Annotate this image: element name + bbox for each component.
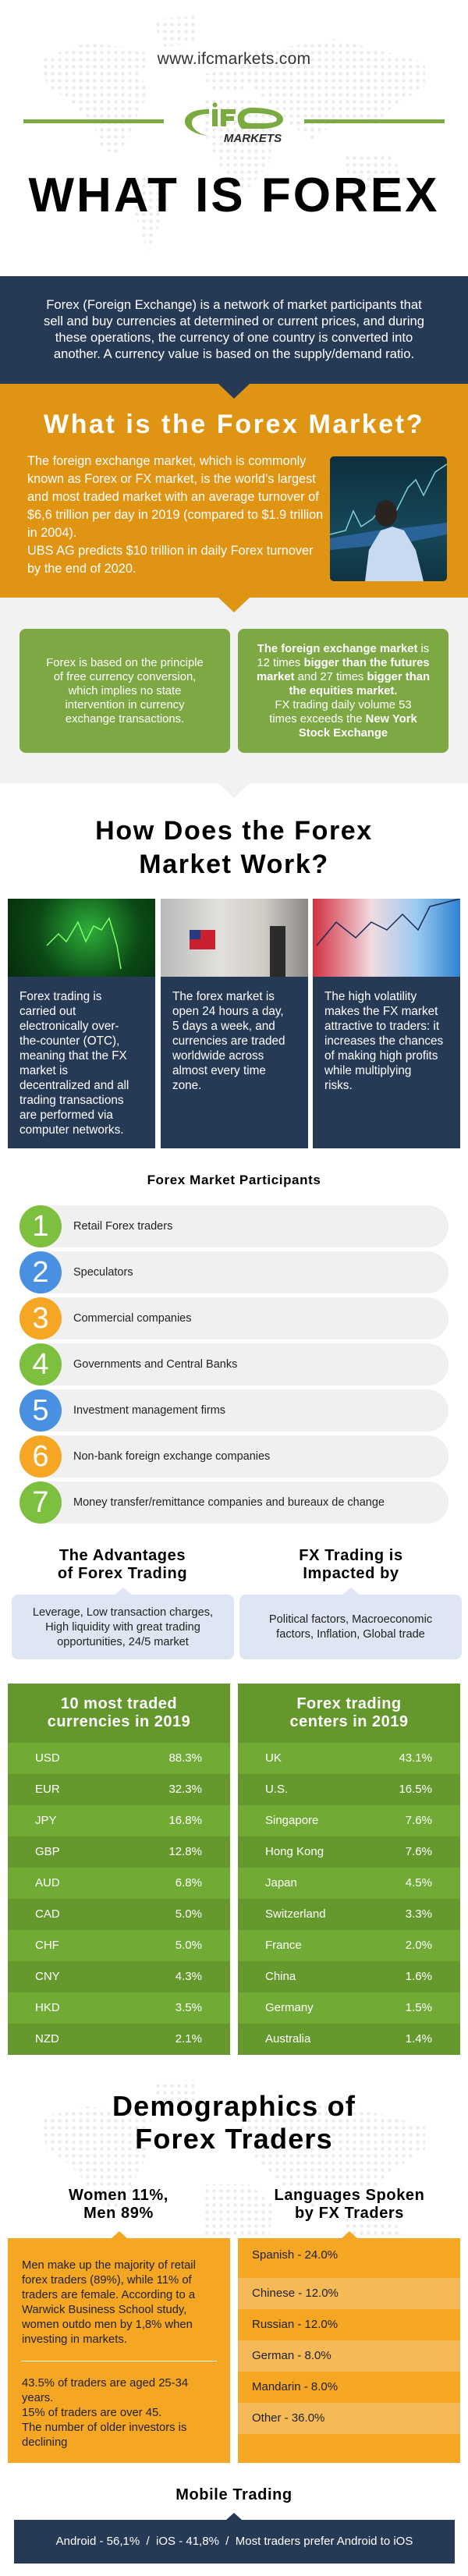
panel: mobile stats [14, 2520, 455, 2564]
text [20, 990, 129, 1137]
text: of making high profits [324, 1049, 438, 1063]
arrow: navy pointer [218, 384, 250, 399]
table: 10 most traded currencies: CNY [35, 1970, 60, 1983]
box: free currency conversion: which implies no state [69, 685, 181, 697]
table: 10 most traded currencies: currencies in 2019 [48, 1713, 190, 1730]
box: free currency conversion: exchange transactions. [66, 713, 184, 726]
text: gender: investing in markets. [22, 2333, 127, 2346]
list: participants: Non-bank foreign exchange companies [73, 1450, 270, 1463]
heading: fx trading is impacted by: FX Trading is [299, 1547, 403, 1564]
table: 10 most traded currencies: USD [35, 1751, 60, 1765]
list: participants: Speculators [73, 1266, 133, 1279]
box: impact factors: Political factors, Macroeconomic [269, 1613, 432, 1626]
text [324, 990, 443, 1092]
list: participants: 4 [32, 1348, 49, 1381]
heading: mobile trading: Mobile Trading [176, 2486, 292, 2503]
text: risks. [324, 1079, 353, 1092]
box: market size comparison: the equities market. [289, 685, 397, 697]
text: the-counter (OTC), [20, 1034, 119, 1048]
box: market size comparison: market and 27 times bigger than [257, 671, 430, 683]
image: red/blue chart [313, 899, 460, 977]
panel: languages list: Spanish - 24.0% [252, 2248, 338, 2262]
text: open 24 hours a day, [172, 1005, 284, 1018]
arrow: orange pointer [218, 598, 250, 612]
text: zone. [172, 1079, 201, 1092]
text: while multiplying [324, 1064, 411, 1077]
text: age: declining [22, 2436, 67, 2449]
table: forex trading centers: Germany [265, 2001, 314, 2014]
list: participants: Governments and Central Banks [73, 1358, 237, 1371]
text: market description: $6,6 trillion per day in 2019 (compared to $1.9 trillion [27, 508, 323, 522]
text: 5 days a week, and [172, 1020, 275, 1033]
box: market size comparison: times exceeds the New York [269, 713, 417, 726]
box: impact factors: factors, Inflation, Global trade [276, 1628, 425, 1641]
text: are performed via [20, 1109, 113, 1122]
list: participants: 7 [32, 1486, 49, 1519]
table: forex trading centers: France [265, 1939, 302, 1952]
box: market size comparison: The foreign exchange market is [257, 643, 429, 655]
table: 10 most traded currencies: 10 most traded [61, 1695, 177, 1712]
text: forex definition: another. A currency value is based on the supply/demand ratio. [54, 346, 414, 361]
heading: languages spoken: by FX Traders [295, 2205, 404, 2222]
box: market size comparison: FX trading daily volume 53 [275, 699, 412, 711]
text: market description: in 2004). [27, 526, 76, 540]
table: forex trading centers: Forex trading [296, 1695, 402, 1712]
table: forex trading centers: 2.0% [406, 1939, 432, 1952]
table: forex trading centers: 1.4% [406, 2032, 432, 2046]
heading: demographics of forex traders: Demographics of [112, 2090, 356, 2122]
list: participants: 5 [32, 1394, 49, 1427]
table: forex trading centers: Australia [265, 2032, 310, 2046]
table: 10 most traded currencies [8, 1684, 230, 2055]
panel: 24 hours market [161, 899, 308, 1148]
background: dotted world map (top) [44, 16, 425, 250]
heading: forex market participants: Forex Market Participants [147, 1173, 321, 1187]
text: forex definition: sell and buy currencies at determined or current prices, and during [44, 314, 424, 328]
table: forex trading centers: 16.5% [399, 1783, 432, 1796]
table: 10 most traded currencies: EUR [35, 1783, 60, 1796]
text: forex definition [44, 297, 424, 361]
text: worldwide across [172, 1049, 264, 1063]
heading: fx trading is impacted by [299, 1547, 403, 1582]
text: gender: women outdo men by 1,8% when [22, 2319, 193, 2331]
table: forex trading centers: 1.5% [406, 2001, 432, 2014]
heading: demographics of forex traders: Forex Traders [135, 2123, 333, 2155]
table: 10 most traded currencies: NZD [35, 2032, 59, 2046]
text: age [22, 2377, 188, 2449]
table: 10 most traded currencies: 3.5% [176, 2001, 202, 2014]
text: carried out [20, 1005, 76, 1018]
table: forex trading centers: 43.1% [399, 1751, 432, 1765]
logo: IFC Markets with green lines [23, 103, 445, 145]
text: market is [20, 1064, 68, 1077]
text: currencies are traded [172, 1034, 285, 1048]
panel: high volatility [313, 899, 460, 1148]
panel: mobile stats: Android - 56,1% / iOS - 41,8% / Most traders prefer Android to iOS [56, 2535, 413, 2548]
text: The forex market is [172, 990, 275, 1003]
box: market size comparison [238, 629, 448, 753]
panel: key facts (gray) [0, 598, 468, 783]
heading: advantages of forex trading: of Forex Trading [58, 1565, 187, 1582]
table: 10 most traded currencies: 5.0% [176, 1907, 202, 1921]
box: free currency conversion: of free currency conversion, [54, 671, 196, 683]
box: advantages list: opportunities, 24/5 market [57, 1636, 189, 1648]
text: forex definition: Forex (Foreign Exchange) is a network of market participants that [46, 297, 422, 312]
panel: languages list [238, 2238, 460, 2463]
list: participants [20, 1205, 448, 1524]
text: decentralized and all [20, 1079, 129, 1092]
table: forex trading centers [238, 1684, 460, 2055]
text: age: 15% of traders are over 45. [22, 2407, 161, 2419]
text: age: The number of older investors is [22, 2422, 186, 2434]
text: Forex trading is [20, 990, 101, 1003]
text: age: years. [22, 2392, 53, 2404]
url text: www.ifcmarkets.com [158, 50, 310, 68]
list: participants: 2 [32, 1256, 49, 1289]
heading: what is the forex market: What is the Forex Market? [44, 410, 424, 439]
logo: IFC Markets with green lines: MARKETS [224, 132, 282, 145]
text: age: 43.5% of traders are aged 25-34 [22, 2377, 188, 2390]
box: market size comparison: Stock Exchange [299, 727, 388, 740]
text: market description: and most traded market with an average turnover of [27, 490, 319, 504]
text: meaning that the FX [20, 1049, 127, 1063]
table: forex trading centers: 4.5% [406, 1876, 432, 1889]
table: forex trading centers: 1.6% [406, 1970, 432, 1983]
heading: women / men: Men 89% [83, 2205, 154, 2222]
heading: languages spoken [275, 2187, 424, 2222]
heading: women / men: Women 11%, [69, 2187, 168, 2204]
background: dotted world map (demographics) [44, 2079, 425, 2239]
text: forex definition: these operations, the currency of one country is converted into [55, 330, 413, 345]
heading: how does the forex market work [95, 816, 373, 879]
table: forex trading centers: Singapore [265, 1814, 318, 1827]
table: forex trading centers: 7.6% [406, 1845, 432, 1858]
table: 10 most traded currencies: 5.0% [176, 1939, 202, 1952]
table: 10 most traded currencies: 32.3% [168, 1783, 202, 1796]
heading: how does the forex market work: Market Work? [139, 850, 329, 879]
heading: fx trading is impacted by: Impacted by [303, 1565, 399, 1582]
box: market size comparison: 12 times bigger than the futures [257, 657, 430, 669]
text: gender [22, 2259, 196, 2346]
box: free currency conversion: Forex is based on the principle [46, 657, 204, 669]
list: participants: 6 [32, 1440, 49, 1473]
title: WHAT IS FOREX [29, 169, 439, 222]
table: 10 most traded currencies: GBP [35, 1845, 60, 1858]
box: free currency conversion [20, 629, 230, 753]
box: impact factors [239, 1595, 462, 1659]
box: advantages list: Leverage, Low transaction charges, [33, 1606, 213, 1619]
panel: languages list: Russian - 12.0% [252, 2318, 338, 2331]
table: 10 most traded currencies: CHF [35, 1939, 59, 1952]
heading: advantages of forex trading [58, 1547, 187, 1582]
text: almost every time [172, 1064, 266, 1077]
list: participants: 1 [32, 1210, 49, 1243]
panel: intro definition (navy) [0, 276, 468, 384]
table: forex trading centers: UK [265, 1751, 282, 1765]
panel: gender & age stats [8, 2238, 230, 2463]
table: forex trading centers: China [265, 1970, 296, 1983]
table: 10 most traded currencies: AUD [35, 1876, 60, 1889]
table: forex trading centers: U.S. [265, 1783, 288, 1796]
box: free currency conversion: intervention in currency [66, 699, 184, 711]
text: trading transactions [20, 1094, 123, 1107]
heading: languages spoken: Languages Spoken [275, 2187, 424, 2204]
list: participants: Money transfer/remittance companies and bureaux de change [73, 1496, 385, 1509]
panel: what is the forex market (orange) [0, 384, 468, 598]
list: participants: 3 [32, 1302, 49, 1335]
image: green trading chart [8, 899, 155, 977]
text: market description: The foreign exchange market, which is commonly [27, 454, 306, 468]
arrow: gray pointer [218, 783, 250, 798]
table: forex trading centers: Japan [265, 1876, 297, 1889]
text: gender: Men make up the majority of retail [22, 2259, 196, 2272]
table: forex trading centers: 3.3% [406, 1907, 432, 1921]
table: 10 most traded currencies: 2.1% [176, 2032, 202, 2046]
list: participants: Retail Forex traders [73, 1220, 172, 1233]
text: market description: UBS AG predicts $10 trillion in daily Forex turnover [27, 544, 314, 558]
table: 10 most traded currencies: 4.3% [176, 1970, 202, 1983]
heading: advantages of forex trading: The Advantages [59, 1547, 186, 1564]
text: gender: Warwick Business School study, [22, 2304, 186, 2316]
text: market description: known as Forex or FX market, is the world’s largest [27, 472, 316, 486]
heading: demographics of forex traders [112, 2090, 356, 2155]
heading: women / men [69, 2187, 168, 2222]
heading: how does the forex market work: How Does the Forex [95, 816, 373, 846]
text: makes the FX market [324, 1005, 438, 1018]
image: stock exchange building [161, 899, 308, 977]
text: attractive to traders: it [324, 1020, 439, 1033]
table: forex trading centers: Switzerland [265, 1907, 326, 1921]
panel: languages list: Other - 36.0% [252, 2411, 324, 2425]
table: forex trading centers: centers in 2019 [289, 1713, 409, 1730]
text: market description [27, 454, 323, 576]
text [172, 990, 285, 1092]
text: electronically over- [20, 1020, 119, 1033]
panel: languages list: Mandarin - 8.0% [252, 2380, 338, 2393]
panel: languages list: Chinese - 12.0% [252, 2287, 339, 2300]
text: The high volatility [324, 990, 417, 1003]
table: 10 most traded currencies: 88.3% [168, 1751, 202, 1765]
box: advantages list: High liquidity with great trading [45, 1621, 200, 1634]
text: market description: by the end of 2020. [27, 562, 136, 576]
table: 10 most traded currencies: 16.8% [168, 1814, 202, 1827]
list: participants: Commercial companies [73, 1312, 192, 1325]
text: gender: forex traders (89%), while 11% of [22, 2274, 192, 2287]
table: 10 most traded currencies: 12.8% [168, 1845, 202, 1858]
table: 10 most traded currencies: HKD [35, 2001, 60, 2014]
table: 10 most traded currencies: CAD [35, 1907, 60, 1921]
text: gender: traders are female. According to a [22, 2289, 195, 2301]
table: 10 most traded currencies: 6.8% [176, 1876, 202, 1889]
text: increases the chances [324, 1034, 443, 1048]
table: forex trading centers: Hong Kong [265, 1845, 324, 1858]
table: 10 most traded currencies: JPY [35, 1814, 57, 1827]
panel: languages list: German - 8.0% [252, 2349, 332, 2362]
table: forex trading centers: 7.6% [406, 1814, 432, 1827]
box: advantages list [12, 1595, 234, 1659]
text: computer networks. [20, 1123, 123, 1137]
panel: OTC electronic trading [8, 899, 155, 1148]
image: trader looking at charts [330, 456, 447, 581]
list: participants: Investment management firms [73, 1404, 225, 1417]
